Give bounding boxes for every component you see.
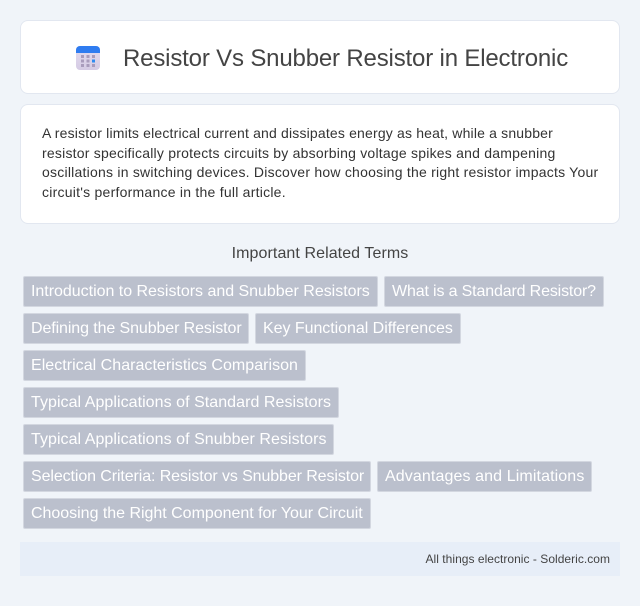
tag (23, 276, 378, 307)
tag: Choosing the Right Component for Your Circuit (31, 505, 363, 522)
tag: Electrical Characteristics Comparison (31, 357, 298, 374)
footer text: All things electronic - Solderic.com (426, 552, 610, 566)
tag (23, 387, 339, 418)
tag: What is a Standard Resistor? (392, 283, 596, 300)
summary text: resistor specifically protects circuits by absorbing voltage spikes and dampening (42, 145, 556, 161)
panel: header (20, 20, 620, 94)
tag (255, 313, 461, 344)
title: Resistor Vs Snubber Resistor in Electronic (123, 45, 568, 72)
tag: Key Functional Differences (263, 320, 453, 337)
summary text: oscillations in switching devices. Discover how choosing the right resistor impacts Your (42, 164, 598, 180)
tag (377, 461, 592, 492)
tag: Selection Criteria: Resistor vs Snubber Resistor (31, 468, 364, 485)
summary text: circuit's performance in the full article. (42, 184, 286, 200)
tag: Typical Applications of Snubber Resistors (31, 431, 327, 448)
panel: summary (20, 104, 620, 224)
tag (23, 498, 371, 529)
tag: Introduction to Resistors and Snubber Resistors (31, 283, 370, 300)
tag (23, 461, 371, 492)
summary text (42, 125, 598, 200)
panel: related term tags (23, 276, 604, 529)
summary text: A resistor limits electrical current and dissipates energy as heat, while a snubber (42, 125, 553, 141)
heading: related terms: Important Related Terms (232, 245, 408, 262)
tag (23, 424, 334, 455)
tag: Advantages and Limitations (385, 468, 584, 485)
footer (20, 542, 620, 576)
tag (23, 313, 249, 344)
tag: Defining the Snubber Resistor (31, 320, 242, 337)
tag: Typical Applications of Standard Resistors (31, 394, 331, 411)
tag (23, 350, 306, 381)
tag (384, 276, 604, 307)
icon: calendar (76, 46, 100, 70)
